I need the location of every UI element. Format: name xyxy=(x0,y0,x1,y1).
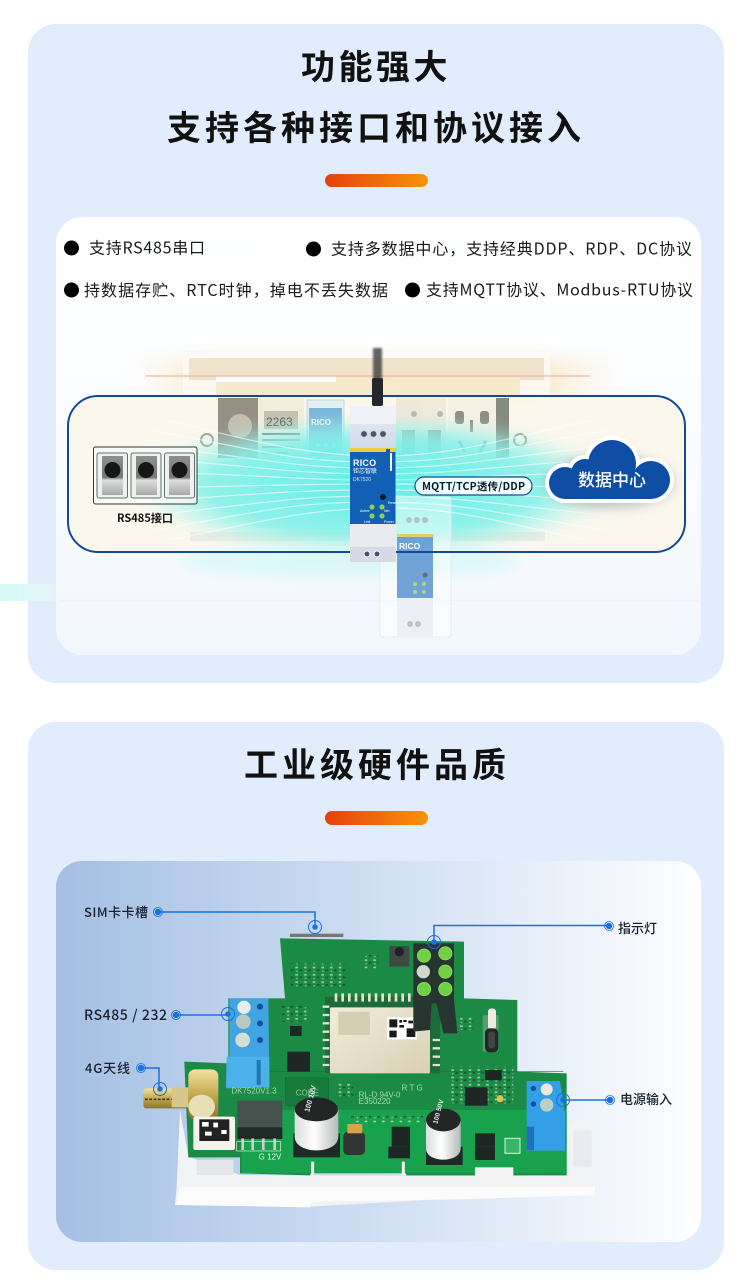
panel: features xyxy=(0,24,724,683)
ghost reflected module: RICO xyxy=(399,541,421,551)
label: indicator: 指示灯 xyxy=(618,918,657,937)
illustration: cabinet and data flow xyxy=(60,348,700,637)
title: hardware: 工业级硬件品质 xyxy=(244,738,510,787)
labels xyxy=(84,902,672,1108)
RS485 port block xyxy=(94,447,197,504)
capacitor right: 100 50V xyxy=(432,1098,446,1125)
capacitor right xyxy=(426,1098,463,1165)
QR label xyxy=(193,1117,235,1150)
glow: stream under box xyxy=(180,546,520,578)
main DTU module: Power xyxy=(384,520,395,524)
capacitor left xyxy=(293,1084,340,1157)
antenna xyxy=(372,348,383,406)
cloud: data center xyxy=(546,440,674,508)
silk text xyxy=(231,1084,423,1161)
main DTU module: Reset xyxy=(388,501,397,505)
label: SIM: SIM卡卡槽 xyxy=(84,902,148,921)
PCB photo xyxy=(143,934,597,1207)
silk text: G 12V xyxy=(259,1152,282,1161)
callout: power leader xyxy=(556,1094,614,1106)
label: 4G: 4G天线 xyxy=(85,1058,130,1077)
blue outline frame xyxy=(68,396,685,552)
frame interior tint xyxy=(68,396,685,552)
accent pill xyxy=(325,174,428,187)
SIM slot xyxy=(290,934,343,937)
bullet: RS485: 支持RS485串口 xyxy=(89,234,205,258)
silk text: RL-D 94V-0 xyxy=(359,1090,401,1099)
callout: antenna leader xyxy=(136,1064,166,1096)
left cyan band xyxy=(0,584,60,601)
callouts xyxy=(136,908,614,1106)
inductor block xyxy=(237,1101,282,1151)
cloud: data center: 数据中心 xyxy=(578,466,646,491)
main DTU module: DK7520 xyxy=(353,477,371,483)
terminal: power input xyxy=(527,1081,565,1151)
PCB board xyxy=(184,938,567,1175)
title: line one: 功能强大 xyxy=(301,40,451,89)
label: power: 电源输入 xyxy=(620,1089,672,1108)
panel of instruments: RICO xyxy=(311,418,331,427)
terminal: RS485 xyxy=(226,998,269,1088)
callout: indicator leader xyxy=(428,922,614,948)
callout: RS485 leader xyxy=(172,1008,234,1020)
ghost reflected module xyxy=(380,497,451,637)
main DTU module: 钜芯智联 xyxy=(353,466,377,475)
accent pill xyxy=(325,811,428,825)
port 2 xyxy=(131,453,161,498)
feature list xyxy=(64,234,693,301)
label: code box xyxy=(285,1078,329,1106)
port 1 xyxy=(97,453,128,498)
panel: hardware quality xyxy=(28,722,724,1270)
panel of instruments xyxy=(201,398,526,458)
USB-C port xyxy=(483,1008,499,1052)
fine SMD parts xyxy=(282,955,513,1122)
stream: white flow lines xyxy=(135,420,625,540)
label: code box: CODE xyxy=(296,1088,319,1097)
title: line two: 支持各种接口和协议接入 xyxy=(167,101,585,150)
LED light pipe xyxy=(413,943,457,1033)
small fuse xyxy=(497,1095,520,1153)
glow: cyan data stream xyxy=(130,414,620,558)
main DTU module: Link xyxy=(364,520,371,524)
inner white card xyxy=(56,217,701,655)
silk text: DK7520V1.3 xyxy=(231,1086,277,1095)
bullet: data centers: 支持多数据中心，支持经典DDP、RDP、DC协议 xyxy=(331,236,692,260)
cellular module xyxy=(323,993,440,1073)
bullet: storage: 持数据存贮、RTC时钟，掉电不丢失数据 xyxy=(84,277,388,301)
main DTU module: RICO xyxy=(353,458,376,468)
main DTU module xyxy=(350,406,397,562)
inner gradient card xyxy=(56,861,701,1242)
panel of instruments: 2263 xyxy=(266,415,293,429)
reset button xyxy=(389,946,409,967)
SMA antenna connector xyxy=(143,1069,218,1119)
callout: SIM leader xyxy=(154,908,322,934)
silk text: R T G xyxy=(402,1084,423,1093)
label: RS485 port: RS485接口 xyxy=(117,510,173,526)
port 3 xyxy=(164,453,194,498)
bullet: MQTT: 支持MQTT协议、Modbus-RTU协议 xyxy=(426,276,693,300)
cabinet frame xyxy=(145,350,590,541)
board notch xyxy=(313,1162,403,1175)
chips xyxy=(287,1026,502,1160)
capacitor left: 100 10V xyxy=(302,1084,318,1113)
main DTU module: Active xyxy=(360,509,370,513)
protocol tag: MQTT/TCP透传/DDP xyxy=(422,479,525,494)
power inductor xyxy=(343,1124,365,1155)
floor line xyxy=(60,600,700,601)
silk text: E350220 xyxy=(359,1097,391,1106)
label: RS485 / 232: RS485 / 232 xyxy=(84,1005,167,1025)
white DIN housing xyxy=(175,1110,597,1207)
white header xyxy=(475,1167,513,1177)
glow: warm backdrop xyxy=(130,358,620,400)
main DTU module: Net xyxy=(384,509,389,513)
